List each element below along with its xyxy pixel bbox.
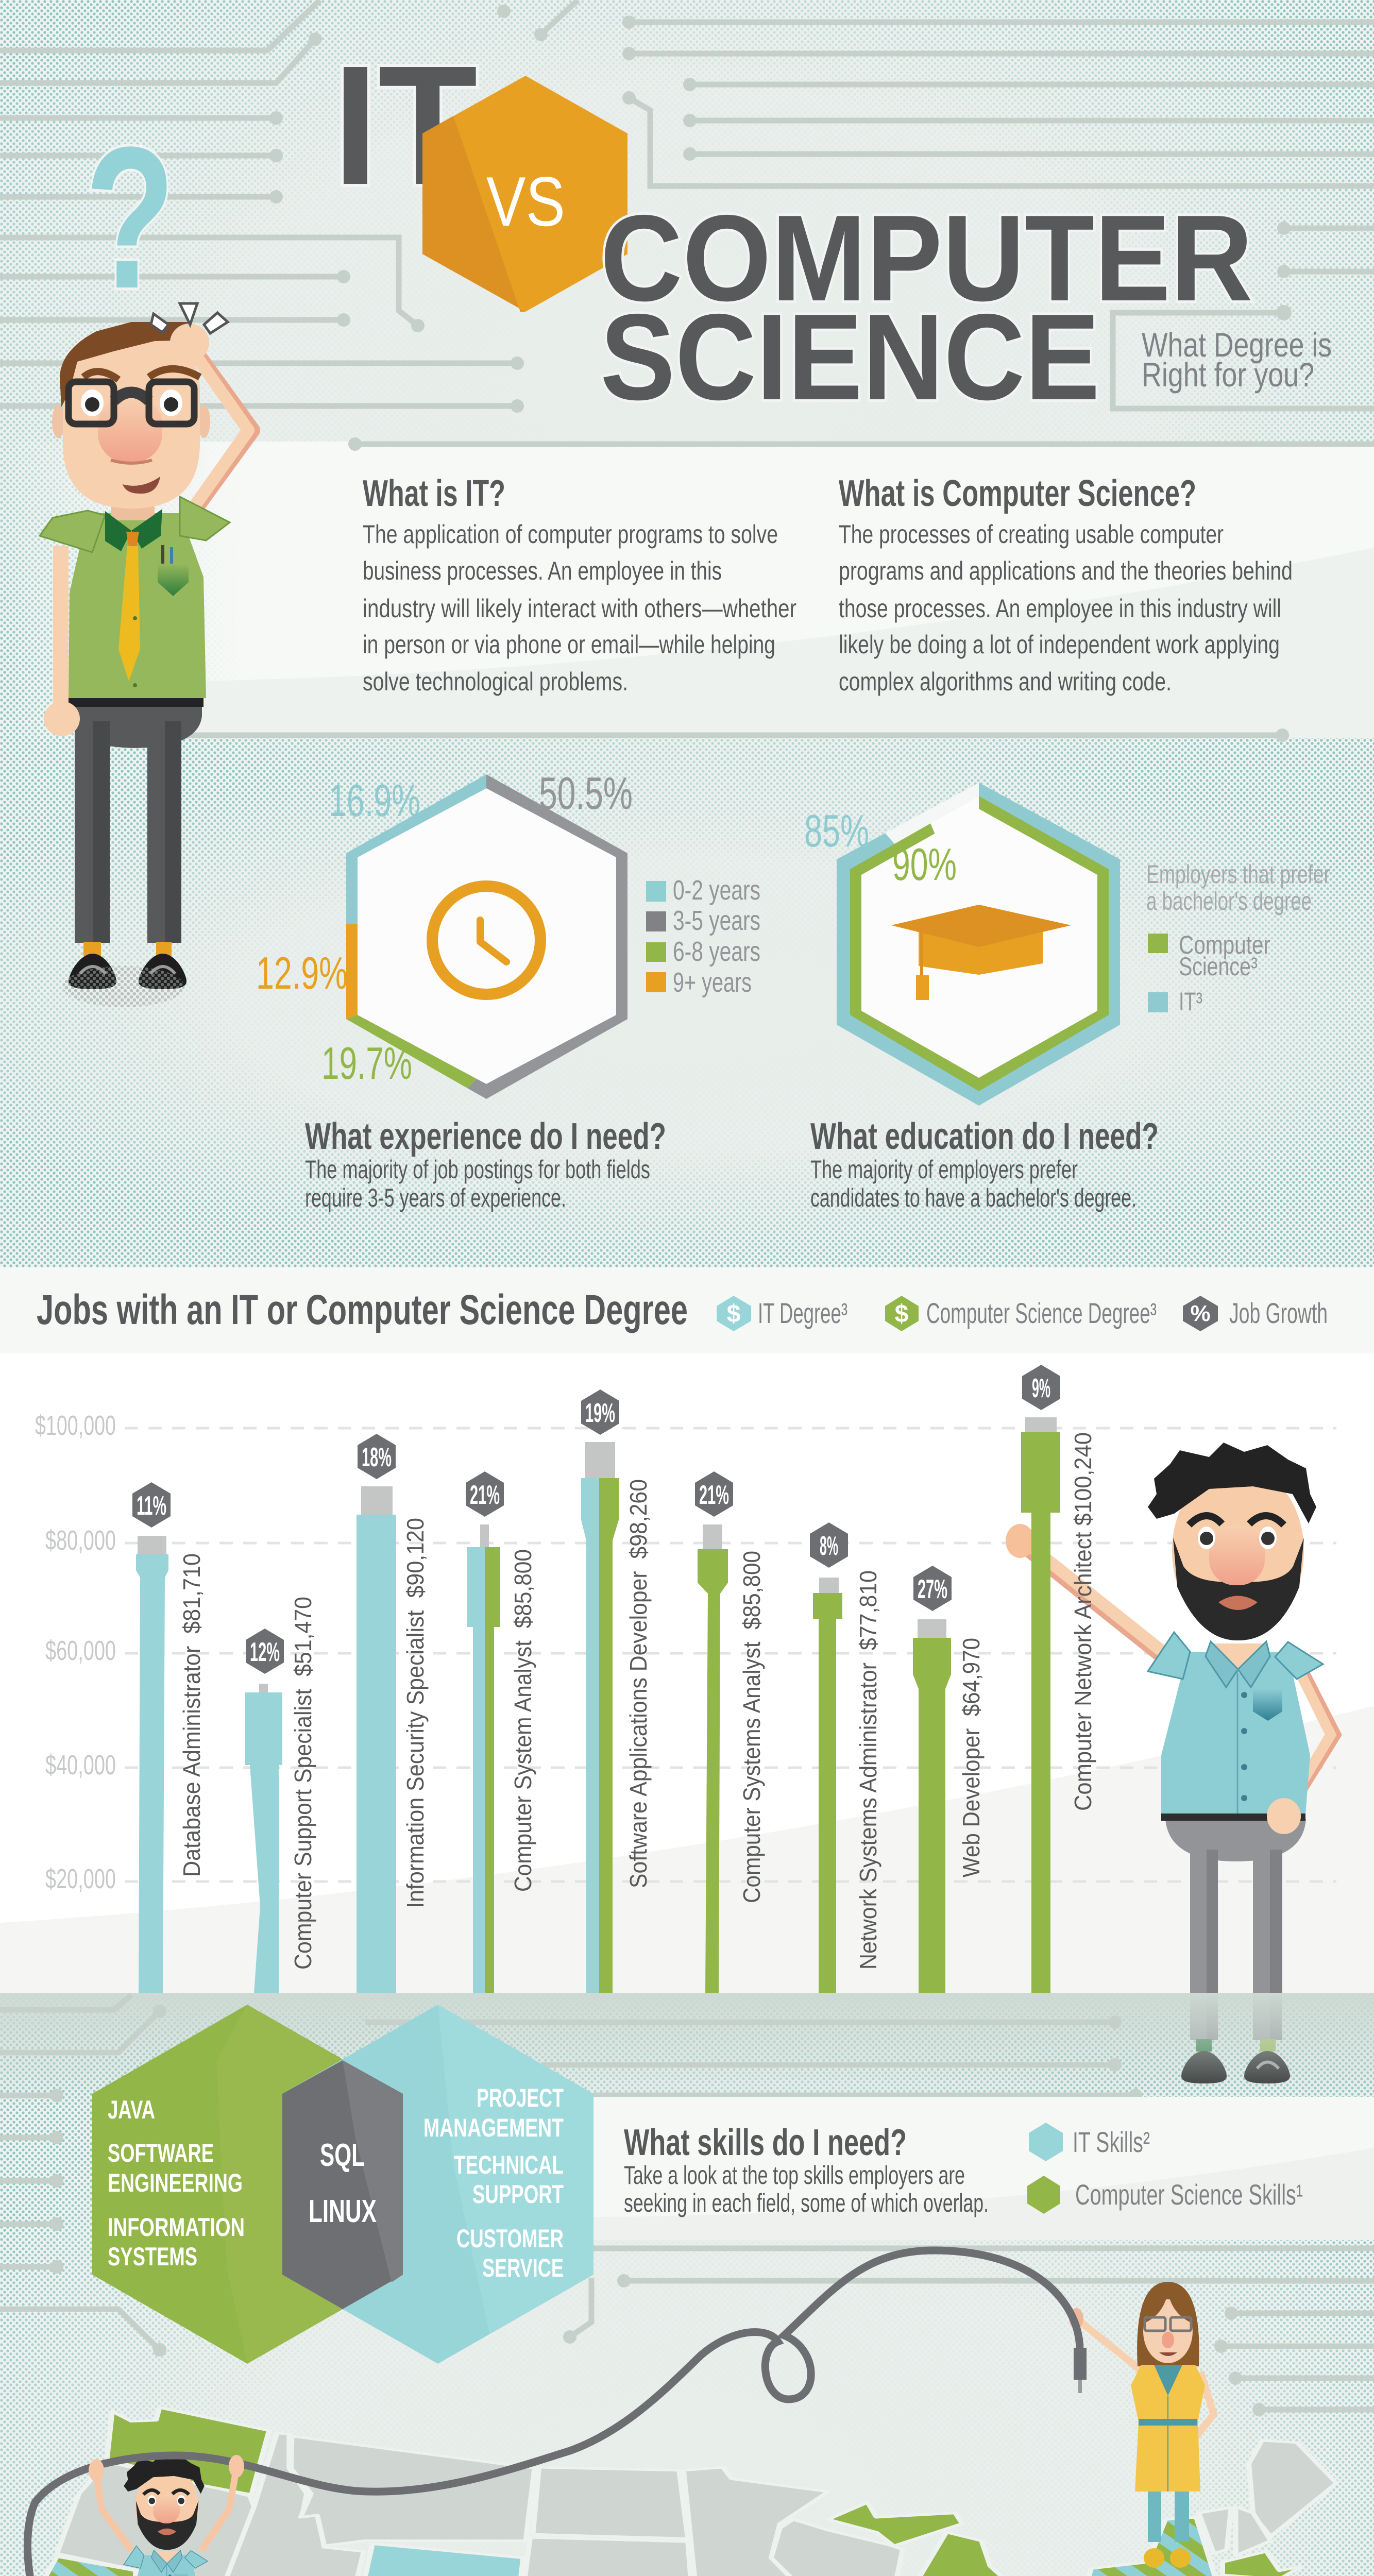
title: Computer Science: SCIENCE [600, 289, 1100, 426]
legend: experience: 3-5 years [673, 905, 760, 936]
bar: Information Security Specialist [357, 1434, 429, 1993]
hexagon: computer science skills: ENGINEERING [108, 2168, 243, 2197]
legend: education: IT³ [1179, 987, 1202, 1016]
circuit lines: skills section [0, 1995, 1374, 2416]
text: what experience: require 3-5 years of experience. [305, 1183, 566, 1212]
text: what skills: What skills do I need? [624, 2122, 907, 2163]
panel: skills [593, 2097, 1374, 2240]
legend: IT degree [717, 1296, 847, 1331]
icon: cable jack [1074, 2348, 1087, 2393]
chart axis and gridlines: $80,000 [45, 1525, 116, 1556]
character: blue shirt man [1006, 1443, 1334, 2083]
states with both job types [40, 2517, 1223, 2576]
shoe shadow [63, 966, 184, 1007]
segment: 0-2 years [346, 774, 486, 924]
character: woman in yellow dress [1069, 2282, 1214, 2568]
overlap: shared skills: SQL [320, 2138, 365, 2173]
hexagon: IT skills: CUSTOMER [456, 2224, 564, 2253]
hexagon: computer science skills [92, 2005, 403, 2364]
text: what education: candidates to have a bachelor's degree. [810, 1183, 1136, 1212]
data labels: 12.9% [256, 947, 348, 998]
data labels: 16.9% [329, 775, 420, 826]
legend: experience: 9+ years [673, 967, 752, 998]
data labels: 85% [804, 805, 869, 856]
text: what experience: What experience do I need? [305, 1116, 666, 1157]
hexagon: computer science skills: INFORMATION [108, 2213, 245, 2242]
text: what education: What education do I need? [810, 1116, 1159, 1157]
bar: Network Systems Administrator [810, 1522, 881, 1993]
map: United States [40, 2408, 1336, 2576]
bar: Database Administrator [132, 1482, 205, 1993]
hexagon: computer science skills: JAVA [108, 2095, 155, 2124]
text: what is IT: solve technological problems. [363, 667, 628, 696]
legend: education: Computer [1179, 930, 1270, 959]
hexagon: IT skills: PROJECT [477, 2083, 564, 2112]
bar: Computer Systems Analyst [695, 1471, 765, 1993]
hexagon: IT skills: MANAGEMENT [423, 2113, 564, 2142]
bar: Software Applications Developer: 19% [585, 1398, 615, 1428]
legend: IT degree: $ [727, 1300, 741, 1328]
hexagon: IT skills [282, 2005, 593, 2364]
confusion marks [151, 303, 228, 333]
bar: Software Applications Developer [581, 1389, 652, 1993]
bar: Computer Network Architect [1021, 1365, 1096, 1993]
bar: Computer Support Specialist: 12% [250, 1637, 280, 1667]
overlap: shared skills: LINUX [309, 2194, 377, 2229]
text: what is computer science: The processes of creating usable computer [839, 520, 1224, 549]
legend: IT skills: IT Skills² [1073, 2126, 1150, 2158]
panel: jobs title band [0, 1267, 1374, 1353]
legend: IT degree: IT Degree³ [758, 1297, 847, 1329]
hexagon: IT skills: TECHNICAL [454, 2150, 564, 2179]
chart axis and gridlines [35, 1410, 1336, 1894]
circuit lines: header [0, 0, 1374, 742]
legend: job growth: % [1190, 1301, 1211, 1326]
panel: chart background [0, 1353, 1374, 1993]
icon: question mark: ? [85, 105, 175, 331]
text: what is IT: in person or via phone or email—while helping [363, 630, 775, 659]
bar: Network Systems Administrator: Network Systems Administrator $77,810 [855, 1570, 881, 1970]
text: what experience [305, 1116, 666, 1212]
subtitle: Right for you? [1142, 355, 1314, 394]
bar: Database Administrator: 11% [137, 1491, 166, 1521]
legend: experience [646, 875, 760, 998]
bar: Computer Network Architect: 9% [1032, 1374, 1050, 1403]
legend: experience: 6-8 years [673, 936, 760, 967]
heading: jobs: Jobs with an IT or Computer Science Degree [37, 1286, 688, 1333]
bar: Computer Support Specialist: Computer Support Specialist $51,470 [290, 1597, 316, 1970]
character: blue shirt man on map [96, 2455, 236, 2576]
bar: Computer Systems Analyst: 21% [699, 1480, 729, 1510]
bar: Network Systems Administrator: 8% [820, 1531, 838, 1561]
chart axis and gridlines: $40,000 [45, 1750, 116, 1781]
segment: 9+ years [346, 924, 358, 1019]
icon: clock [432, 886, 540, 994]
title: Computer Science [600, 190, 1253, 426]
icon: orange VS hexagon [422, 76, 627, 312]
bar: Database Administrator: Database Administrator $81,710 [178, 1553, 205, 1877]
legend: computer science degree [885, 1296, 1157, 1331]
bar: Information Security Specialist: Information Security Specialist $90,120 [402, 1518, 429, 1908]
subtitle: What Degree is [1142, 326, 1332, 364]
chart axis and gridlines: $100,000 [35, 1410, 116, 1441]
legend: job growth: Job Growth [1229, 1297, 1328, 1329]
bar: Web Developer: 27% [918, 1574, 947, 1604]
diagram: skills venn hexagons [92, 2005, 593, 2364]
bar: Information Security Specialist: 18% [362, 1443, 392, 1472]
hexagon: computer science skills: SOFTWARE [108, 2139, 214, 2167]
text: what is IT: business processes. An employee in this [363, 556, 722, 585]
character: green shirt man [40, 303, 252, 1007]
legend: education [1146, 860, 1330, 1016]
bar: Computer Support Specialist [245, 1597, 316, 1993]
text: what skills: Take a look at the top skills employers are [624, 2161, 965, 2190]
computer science job states [107, 2408, 1301, 2576]
data labels: 19.7% [321, 1038, 412, 1089]
data labels: 50.5% [539, 768, 633, 819]
data labels [804, 805, 957, 890]
bar: Web Developer: Web Developer $64,970 [958, 1638, 985, 1877]
icon: orange VS hexagon: VS [486, 162, 565, 241]
segment: 3-5 years [467, 774, 627, 1099]
chart axis and gridlines: $20,000 [45, 1863, 116, 1894]
text: what is computer science [839, 473, 1293, 696]
grey states [57, 2433, 1336, 2576]
bar: Computer System Analyst: Computer System Analyst $85,800 [510, 1549, 536, 1892]
bar: Web Developer [913, 1566, 985, 1993]
hexagon: computer science skills: SYSTEMS [108, 2242, 197, 2271]
bar: Computer Systems Analyst: Computer Systems Analyst $85,800 [738, 1551, 765, 1903]
title: Computer Science: COMPUTER [600, 190, 1253, 327]
text: what is IT [363, 473, 796, 696]
legend: IT skills [1029, 2123, 1150, 2161]
panel: intro background [0, 442, 1374, 738]
text: what is computer science: complex algorithms and writing code. [839, 667, 1172, 696]
legend: computer science degree: Computer Science Degree³ [926, 1297, 1157, 1329]
legend: experience: 0-2 years [673, 875, 760, 906]
legend: computer science degree: $ [895, 1300, 909, 1328]
legend: education: a bachelor's degree [1146, 887, 1312, 916]
text: what is computer science: What is Computer Science? [839, 473, 1196, 514]
hexagon: IT skills: SUPPORT [472, 2180, 564, 2209]
data labels [256, 768, 633, 1089]
raised arm [61, 355, 252, 711]
overlap: shared skills [282, 2060, 403, 2309]
bar: Computer System Analyst [466, 1471, 536, 1993]
data labels: 90% [892, 839, 957, 890]
IT job states [352, 2544, 1220, 2576]
bar: Software Applications Developer: Software Applications Developer $98,260 [625, 1479, 652, 1888]
text: what is IT: The application of computer programs to solve [363, 520, 778, 549]
cable [27, 2250, 1080, 2576]
title: IT: IT [333, 30, 478, 220]
legend: job growth [1183, 1296, 1328, 1331]
text: what is IT: industry will likely interact with others—whether [363, 594, 796, 623]
subtitle [1142, 326, 1332, 394]
text: what experience: The majority of job postings for both fields [305, 1155, 650, 1184]
segment: 6-8 years [346, 1015, 477, 1088]
chart: education hexagon [804, 783, 1120, 1106]
text: what skills: seeking in each field, some of which overlap. [624, 2189, 989, 2217]
bar: Computer System Analyst: 21% [470, 1480, 500, 1510]
chart axis and gridlines: $60,000 [45, 1635, 116, 1666]
hands holding cable [89, 2455, 783, 2576]
legend: computer science skills [1027, 2176, 1303, 2214]
arm reaching to cable [1030, 1547, 1334, 1809]
text: what skills [624, 2122, 989, 2217]
text: what education: The majority of employers prefer [810, 1155, 1078, 1184]
text: what is IT: What is IT? [363, 473, 505, 514]
bar: Computer Network Architect: Computer Network Architect $100,240 [1070, 1432, 1096, 1811]
legend: education: Science³ [1179, 952, 1258, 981]
chart: experience hexagon [256, 768, 633, 1099]
icon: graduation cap [891, 905, 1071, 1000]
text: what education [810, 1116, 1159, 1212]
hexagon: IT skills: SERVICE [482, 2253, 564, 2282]
